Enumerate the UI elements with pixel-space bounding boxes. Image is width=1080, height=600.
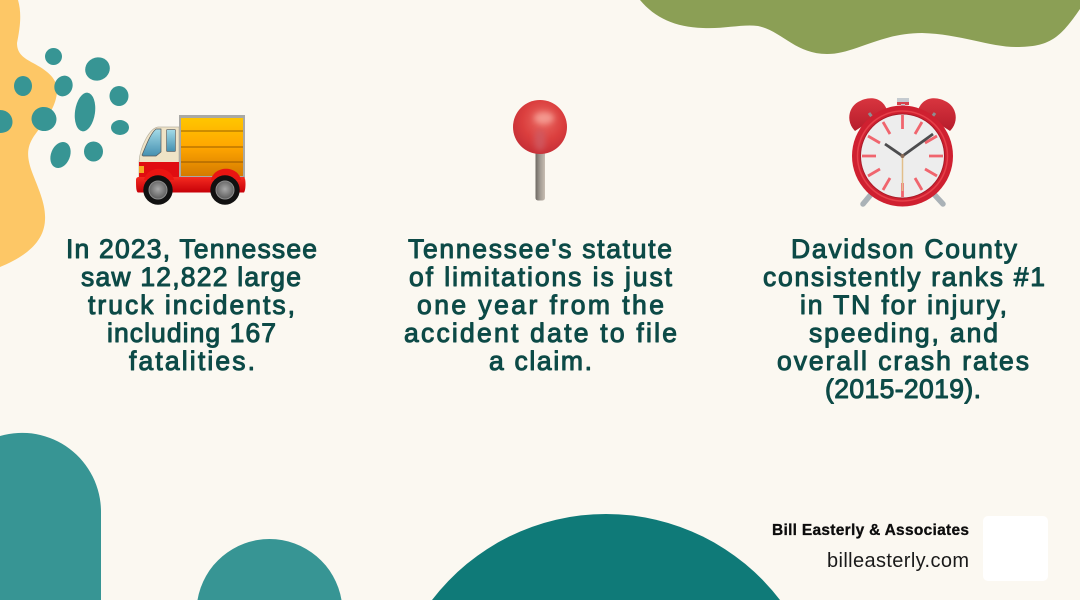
fact text: large truck incidents: In 2023, Tennessee xyxy=(66,234,317,264)
teal dots cluster xyxy=(0,48,129,171)
fact text: Davidson County crash rates: consistently ranks #1 xyxy=(763,262,1045,292)
website: billeasterly.com xyxy=(827,550,969,572)
fact text: large truck incidents xyxy=(66,234,317,376)
fact text: Davidson County crash rates: overall crash rates xyxy=(777,346,1029,376)
icon: delivery truck xyxy=(136,115,246,205)
icon: round pushpin xyxy=(513,100,567,200)
yellow blob xyxy=(0,0,57,267)
fact text: statute of limitations: of limitations is just xyxy=(409,262,673,292)
fact text: large truck incidents: truck incidents, xyxy=(88,290,295,320)
fact text: Davidson County crash rates: in TN for injury, xyxy=(800,290,1007,320)
fact text: Davidson County crash rates: (2015-2019). xyxy=(825,374,981,404)
fact text: statute of limitations: Tennessee's statute xyxy=(408,234,672,264)
logo placeholder xyxy=(983,516,1048,581)
fact text: large truck incidents: saw 12,822 large xyxy=(81,262,301,292)
fact text: Davidson County crash rates: speeding, and xyxy=(809,318,998,348)
fact text: statute of limitations xyxy=(404,234,677,376)
fact text: statute of limitations: one year from the xyxy=(417,290,664,320)
brand name: Bill Easterly & Associates xyxy=(772,522,969,539)
fact text: statute of limitations: accident date to file xyxy=(404,318,677,348)
fact text: large truck incidents: fatalities. xyxy=(129,346,255,376)
green wave blob xyxy=(640,0,1080,54)
bottom teal semicircle xyxy=(198,539,342,600)
fact text: large truck incidents: including 167 xyxy=(107,318,276,348)
fact text: Davidson County crash rates: Davidson County xyxy=(791,234,1018,264)
bottom centre dark teal dome xyxy=(432,514,780,600)
icon: alarm clock xyxy=(849,98,956,206)
bottom left teal arch xyxy=(0,433,101,600)
fact text: statute of limitations: a claim. xyxy=(489,346,592,376)
fact text: Davidson County crash rates xyxy=(763,234,1045,404)
